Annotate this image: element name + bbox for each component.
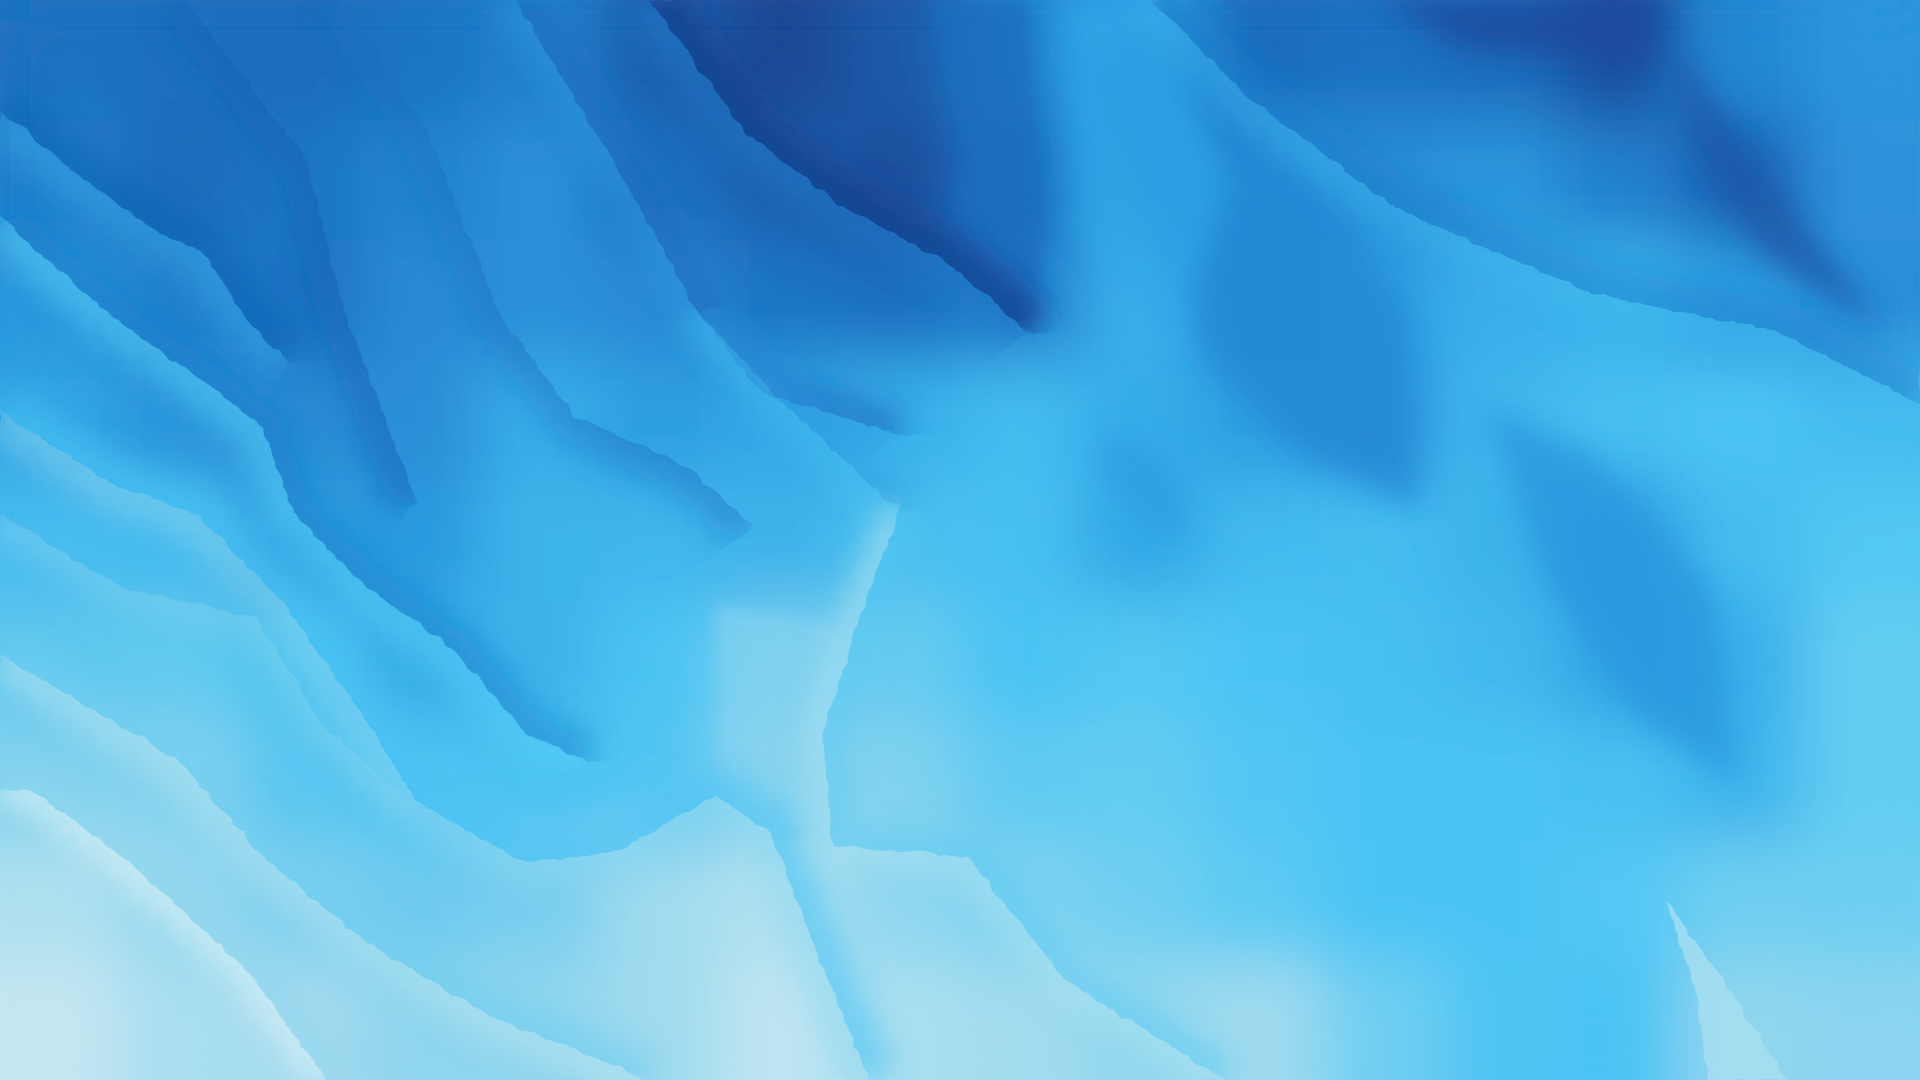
ridge: lowest pale band [258, 980, 329, 1072]
ridge: lower pale band [0, 655, 649, 1080]
ridge: centre cyan band [698, 312, 900, 512]
ridge: soft dark fold upper left [184, 0, 416, 502]
row 2 [0, 240, 1920, 361]
soft dark lobes on the right [1078, 0, 1886, 784]
light streak beside the central dark band [1059, 0, 1224, 355]
row 4 [0, 480, 1920, 601]
pale streak lower right [1665, 900, 1788, 1080]
ridge: upper left dark band [0, 110, 288, 361]
ridge: pale crease in the centre [823, 512, 1224, 1080]
row 1 [0, 120, 1920, 241]
row 3 [0, 360, 1920, 481]
ridge: soft fold second band [343, 0, 753, 527]
ridge: right side dark edge [1151, 0, 1920, 404]
row 5 [0, 600, 1920, 721]
ridge: navy top band [649, 0, 1029, 333]
row 8 [0, 960, 1920, 1080]
dark shoulder of the top band [931, 0, 1047, 333]
pale central wedge [716, 606, 845, 845]
ridge: central dark band [514, 0, 900, 435]
row 6 [0, 720, 1920, 841]
row 7 [0, 840, 1920, 961]
ridge: pale boundary [0, 410, 869, 1080]
row 0 [0, 0, 1920, 120]
ridge: second band [0, 214, 588, 762]
ridge: faint pale band left [0, 514, 416, 808]
